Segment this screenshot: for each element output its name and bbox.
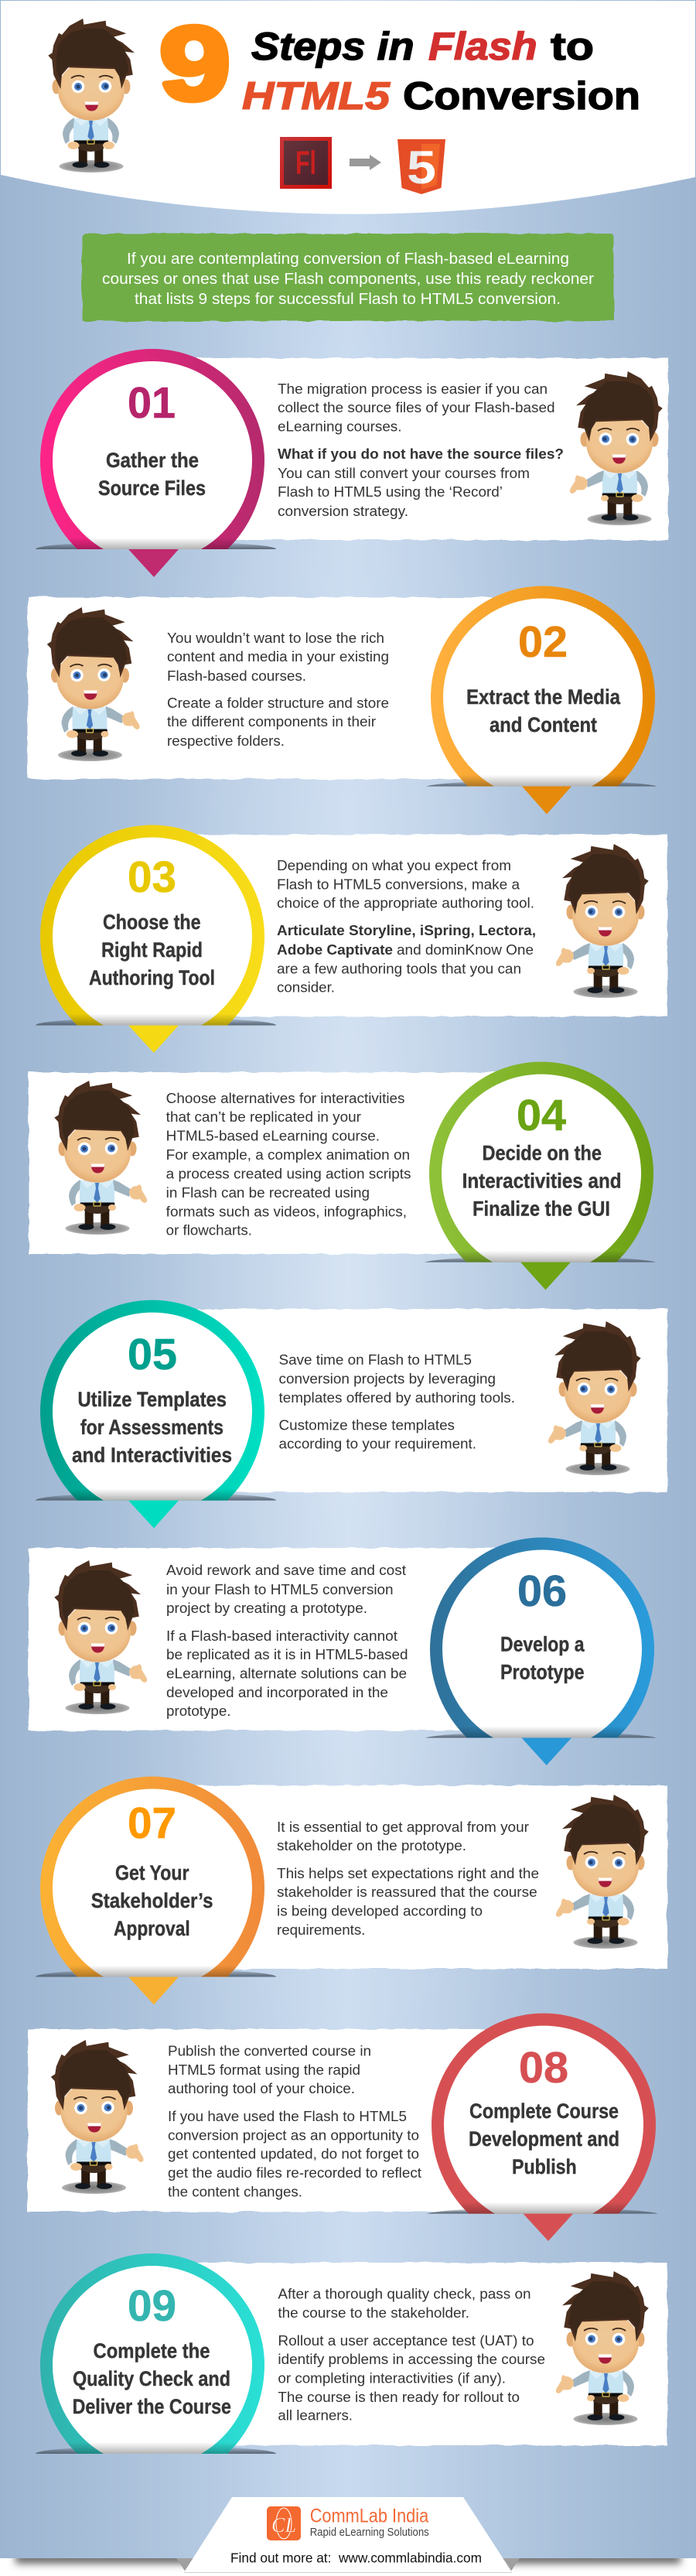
text: step 3 xyxy=(277,858,536,996)
pin: step 7: Get Your xyxy=(115,1861,189,1884)
text: step 9: The course is then ready for rollout to xyxy=(278,2390,520,2405)
pin: step 8: 08 xyxy=(519,2043,568,2092)
text: step 8: Publish the converted course in xyxy=(168,2044,371,2059)
text: step 2: You wouldn’t want to lose the rich xyxy=(167,630,384,646)
pin: step 7: 07 xyxy=(128,1799,176,1847)
text: step 4: HTML5-based eLearning course. xyxy=(166,1128,380,1143)
title: Flash xyxy=(428,25,537,68)
title: Conversion xyxy=(403,74,640,118)
pin: step 3 xyxy=(36,825,276,1053)
brand name xyxy=(310,2506,429,2539)
text: step 5: Customize these templates xyxy=(278,1418,455,1433)
text: step 8 xyxy=(168,2044,421,2200)
brand name: CommLab India xyxy=(310,2506,428,2527)
text: step 1: You can still convert your courses from xyxy=(278,466,530,481)
panel: step 8 xyxy=(28,2014,658,2241)
arrow: Flash to HTML5 xyxy=(350,155,381,170)
text: step 1: collect the source files of your Flash-based xyxy=(278,400,555,415)
text: step 3: are a few authoring tools that you can xyxy=(277,962,521,977)
text: step 7: It is essential to get approval from your xyxy=(277,1819,529,1835)
icon: HTML5 logo xyxy=(397,139,445,194)
website line: Find out more at: www.commlabindia.com xyxy=(230,2550,482,2565)
text: step 2: Create a folder structure and store xyxy=(167,695,389,711)
brand name: Rapid eLearning Solutions xyxy=(310,2526,429,2539)
text: step 8: conversion project as an opportunity to xyxy=(168,2127,419,2143)
text: step 4: in Flash can be recreated using xyxy=(166,1185,370,1201)
text: step 3: Articulate Storyline, iSpring, Lectora, xyxy=(277,923,536,938)
character: step 3 xyxy=(556,844,649,998)
header: white curved banner xyxy=(1,1,695,214)
text: step 1: The migration process is easier if you can xyxy=(278,381,548,397)
pin: step 3: Authoring Tool xyxy=(89,966,215,989)
panel: step 7 xyxy=(36,1776,667,2004)
pin: step 6 xyxy=(425,1538,657,1765)
icon: HTML5 logo: 5 xyxy=(407,142,436,193)
pin: step 3: Choose the xyxy=(103,910,201,934)
pin: step 9 xyxy=(36,2253,276,2454)
panel: step 4 xyxy=(29,1062,656,1290)
pin: step 7: Stakeholder’s xyxy=(91,1889,213,1912)
text: step 9: or completing interactivities (if any). xyxy=(278,2371,506,2386)
pin: step 4 xyxy=(425,1062,656,1290)
pin: step 4: Finalize the GUI xyxy=(473,1197,610,1221)
pin: step 1: Source Files xyxy=(98,477,206,500)
text: step 6: Avoid rework and save time and cost xyxy=(166,1563,406,1578)
text: step 8: HTML5 format using the rapid xyxy=(168,2062,360,2078)
text: step 9: the course to the stakeholder. xyxy=(278,2305,469,2321)
text: step 7: is being developed according to xyxy=(277,1904,483,1919)
text: step 8: the content changes. xyxy=(168,2185,302,2200)
pin: step 3: Right Rapid xyxy=(101,938,203,962)
footer ribbon xyxy=(176,2497,520,2573)
text: step 7: requirements. xyxy=(277,1922,365,1938)
text: step 8: authoring tool of your choice. xyxy=(168,2081,355,2096)
text: step 9: Rollout a user acceptance test (UAT) to xyxy=(278,2333,534,2349)
pin: step 7: Approval xyxy=(114,1917,190,1940)
pin: step 8: Complete Course xyxy=(469,2099,619,2123)
text: step 9 xyxy=(278,2287,545,2424)
text: step 5: according to your requirement. xyxy=(278,1437,476,1452)
pin: step 3: 03 xyxy=(128,852,176,901)
text: step 7: stakeholder is reassured that the course xyxy=(277,1884,537,1900)
title: Steps in xyxy=(251,25,415,68)
character: step 9 xyxy=(556,2271,649,2425)
character: step 1 xyxy=(570,371,663,525)
intro callout: If you are contemplating conversion of Flash-based eLearning xyxy=(127,250,569,268)
pin: step 9: Deliver the Course xyxy=(73,2395,231,2418)
icon: Flash logo: Fl xyxy=(295,145,316,182)
pin: step 6: Develop a xyxy=(500,1633,585,1656)
icon: CommLab logo xyxy=(267,2506,301,2540)
pin: step 5: for Assessments xyxy=(80,1416,223,1439)
text: step 5 xyxy=(278,1352,515,1452)
text: step 9: all learners. xyxy=(278,2408,353,2424)
text: step 1: conversion strategy. xyxy=(278,504,408,519)
title xyxy=(159,5,640,122)
panel: step 3 xyxy=(36,825,667,1053)
pin: step 2: Extract the Media xyxy=(466,685,621,709)
text: step 3: Flash to HTML5 conversions, make a xyxy=(277,877,520,893)
text: step 3: Depending on what you expect from xyxy=(277,858,511,873)
text: step 6 xyxy=(166,1563,408,1719)
pin: step 9: 09 xyxy=(128,2281,176,2330)
text: step 4: formats such as videos, infographics, xyxy=(166,1204,407,1219)
pin: step 9: Quality Check and xyxy=(73,2367,230,2390)
pin: step 4: Decide on the xyxy=(483,1141,602,1164)
text: step 6: project by creating a prototype. xyxy=(166,1601,367,1616)
panel: step 2 xyxy=(28,586,657,814)
pin: step 8: Development and xyxy=(469,2127,619,2151)
text: step 6: be replicated as it is in HTML5-based xyxy=(166,1647,408,1662)
pin: step 6: 06 xyxy=(517,1566,567,1615)
text: step 4: For example, a complex animation on xyxy=(166,1147,410,1163)
text: step 6: eLearning, alternate solutions can be xyxy=(166,1666,407,1681)
icon: CommLab logo: CL xyxy=(271,2513,296,2537)
text: step 6: in your Flash to HTML5 conversion xyxy=(166,1582,394,1597)
panel: step 1 xyxy=(36,349,668,577)
icon: Flash logo xyxy=(280,137,332,189)
text: step 9: identify problems in accessing the course xyxy=(278,2352,545,2367)
text: step 9: After a thorough quality check, pass on xyxy=(278,2287,531,2302)
panel: step 5 xyxy=(36,1300,667,1529)
text: step 1: Flash to HTML5 using the ‘Record’ xyxy=(278,484,503,500)
text: step 4: or flowcharts. xyxy=(166,1222,252,1238)
text: step 2: the different components in their xyxy=(167,714,376,729)
pin: step 8: Publish xyxy=(512,2155,577,2178)
character: header mascot xyxy=(48,19,135,173)
text: step 3: Adobe Captivate xyxy=(277,942,393,958)
pin: step 5 xyxy=(36,1300,276,1529)
pin: step 5: and Interactivities xyxy=(72,1443,232,1467)
text: step 5: templates offered by authoring tools. xyxy=(278,1390,515,1406)
text: step 8: get the audio files re-recorded to reflect xyxy=(168,2165,421,2181)
text: step 1: What if you do not have the source files? xyxy=(278,446,564,462)
text: step 7: This helps set expectations right and the xyxy=(277,1866,539,1881)
character: step 6 xyxy=(54,1560,147,1714)
text: step 2: content and media in your existing xyxy=(167,649,389,664)
text: step 7: stakeholder on the prototype. xyxy=(277,1838,466,1853)
panel: step 9 xyxy=(36,2253,667,2454)
pin: step 6: Prototype xyxy=(500,1661,585,1684)
text: step 6: If a Flash-based interactivity cannot xyxy=(166,1628,397,1644)
pin: step 9: Complete the xyxy=(93,2339,210,2362)
text: step 5: conversion projects by leveraging xyxy=(278,1372,496,1387)
text: step 4: Choose alternatives for interactivities xyxy=(166,1091,404,1106)
text: step 5: Save time on Flash to HTML5 xyxy=(278,1352,472,1368)
text: step 2: Flash-based courses. xyxy=(167,668,306,684)
text: step 1: eLearning courses. xyxy=(278,419,402,435)
text: step 1 xyxy=(278,381,564,519)
text: step 2: respective folders. xyxy=(167,733,285,749)
pin: step 1: 01 xyxy=(128,378,176,427)
character: step 2 xyxy=(47,607,140,761)
text: step 6: prototype. xyxy=(166,1703,230,1719)
pin: step 2: 02 xyxy=(518,617,568,666)
intro callout xyxy=(82,234,614,321)
text: step 8: If you have used the Flash to HTML5 xyxy=(168,2109,407,2124)
character: step 5 xyxy=(548,1321,641,1475)
pin: step 7 xyxy=(36,1776,276,2004)
title: 9 xyxy=(159,5,230,122)
pin: step 4: 04 xyxy=(517,1091,567,1139)
text: step 4: a process created using action scripts xyxy=(166,1167,411,1182)
pin: step 5: Utilize Templates xyxy=(77,1388,227,1411)
pin: step 8 xyxy=(427,2014,658,2241)
title: to xyxy=(551,25,594,68)
text: step 8: get contented updated, do not forget to xyxy=(168,2147,419,2162)
text: step 3: consider. xyxy=(277,980,335,996)
title: HTML5 xyxy=(242,74,391,118)
text: step 2 xyxy=(167,630,389,749)
text: step 4: that can’t be replicated in your xyxy=(166,1109,361,1125)
pin: step 4: Interactivities and xyxy=(462,1170,622,1193)
text: step 4 xyxy=(166,1091,411,1238)
pin: step 1: Gather the xyxy=(106,449,199,472)
text: step 3: and dominKnow One xyxy=(397,942,534,958)
text: step 3: choice of the appropriate authoring tool. xyxy=(277,896,534,911)
pin: step 2: and Content xyxy=(490,713,597,736)
panel: step 6 xyxy=(29,1538,657,1765)
intro callout: that lists 9 steps for successful Flash to HTML5 conversion. xyxy=(135,290,561,308)
text: step 7 xyxy=(277,1819,539,1938)
intro callout: courses or ones that use Flash components, use this ready reckoner xyxy=(102,270,594,288)
text: step 6: developed and incorporated in the xyxy=(166,1685,388,1700)
character: step 8 xyxy=(51,2040,144,2194)
pin: step 1 xyxy=(36,349,276,577)
character: step 4 xyxy=(54,1081,147,1235)
character: step 7 xyxy=(556,1795,649,1949)
pin: step 2 xyxy=(426,586,657,814)
pin: step 5: 05 xyxy=(128,1330,177,1379)
